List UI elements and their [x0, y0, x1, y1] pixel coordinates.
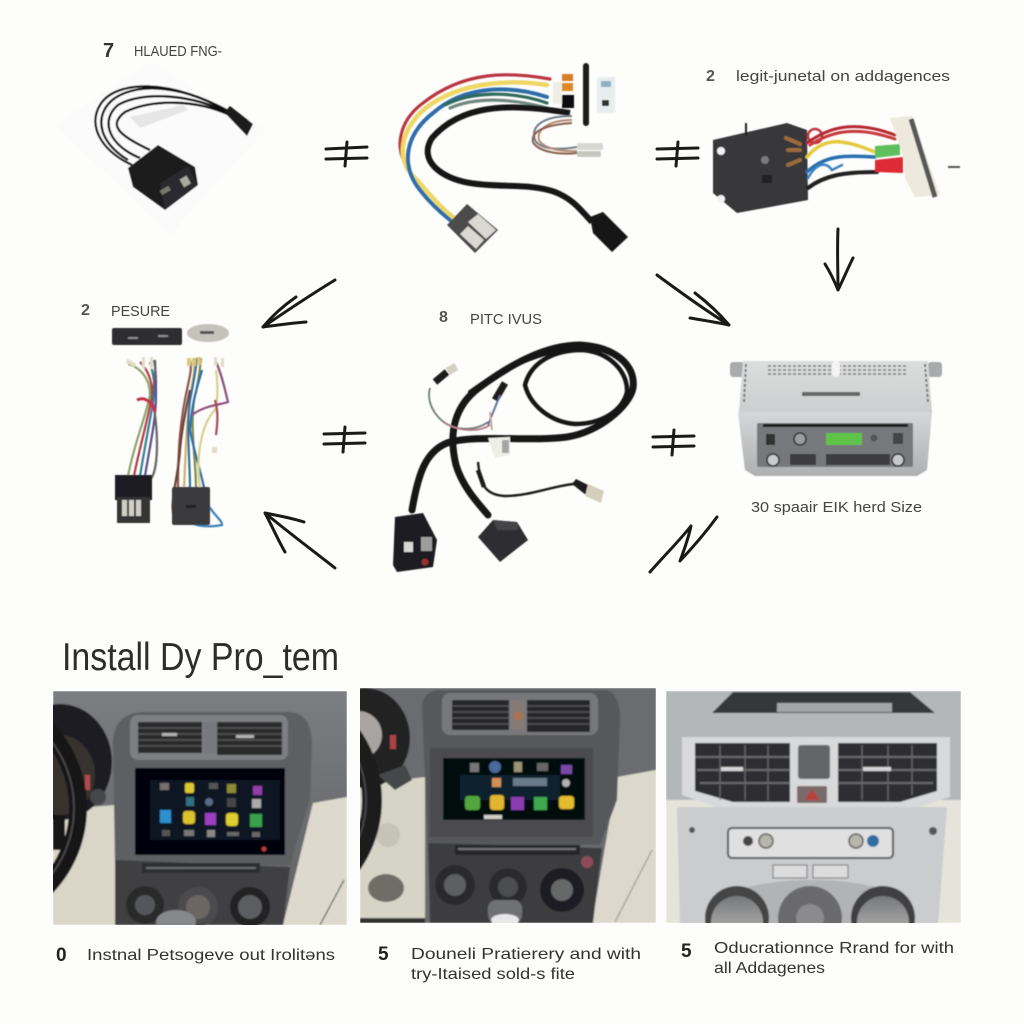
symbol: join middle right	[653, 430, 694, 455]
component: black adapter cable	[55, 62, 265, 235]
symbol: join top left	[326, 142, 367, 166]
label: radio caption: 30 spaair EIK herd Size	[751, 499, 922, 516]
caption: photo three: all Addagenes	[714, 960, 825, 977]
symbol: join middle left	[324, 427, 365, 452]
symbol: join top right	[657, 142, 698, 166]
component: junction module	[713, 116, 960, 213]
label: middle centre heading: PITC IVUS	[470, 311, 542, 328]
label: middle centre heading: 8	[439, 309, 448, 326]
photo: dashboard one	[53, 691, 347, 925]
caption: photo one: Instnal Petsogeve out Irolitəns	[87, 947, 335, 964]
caption: photo one	[56, 945, 335, 966]
caption: photo two: try-Itaised sold-s fite	[411, 966, 575, 983]
photo: dashboard three	[666, 691, 961, 923]
heading: install by pro: Install Dy Pro_tem	[62, 636, 339, 679]
caption: photo three	[681, 940, 954, 977]
arrow: down left from top centre	[263, 280, 335, 327]
arrow: back to lower left	[265, 513, 335, 568]
caption: photo one: 0	[56, 945, 67, 966]
caption: photo two	[378, 944, 641, 983]
arrow: down right from top centre	[657, 275, 729, 325]
component: loom pair	[112, 324, 229, 526]
caption: photo three: 5	[681, 941, 692, 962]
component: braided cable	[393, 345, 633, 572]
arrow: zigzag lower right	[650, 517, 717, 572]
caption: photo two: 5	[378, 944, 389, 965]
label: top left heading: HLAUED FNG-	[134, 43, 222, 60]
label: middle centre heading	[439, 309, 542, 328]
component: head unit radio	[730, 361, 942, 476]
label: top right heading: legit-junetal on addagences	[736, 68, 950, 85]
label: top left heading: 7	[103, 40, 114, 62]
label: top left heading	[103, 40, 222, 62]
caption: photo two: Douneli Pratierery and with	[411, 946, 641, 963]
label: top right heading: 2	[706, 68, 715, 85]
component: coloured wiring harness	[400, 63, 628, 253]
label: middle left heading	[81, 302, 170, 320]
label: middle left heading: PESURE	[111, 303, 170, 320]
label: middle left heading: 2	[81, 302, 90, 319]
photo: dashboard two	[360, 688, 656, 923]
arrow: down from top right	[825, 229, 853, 290]
caption: photo three: Oducrationnce Rrand for with	[714, 940, 954, 957]
